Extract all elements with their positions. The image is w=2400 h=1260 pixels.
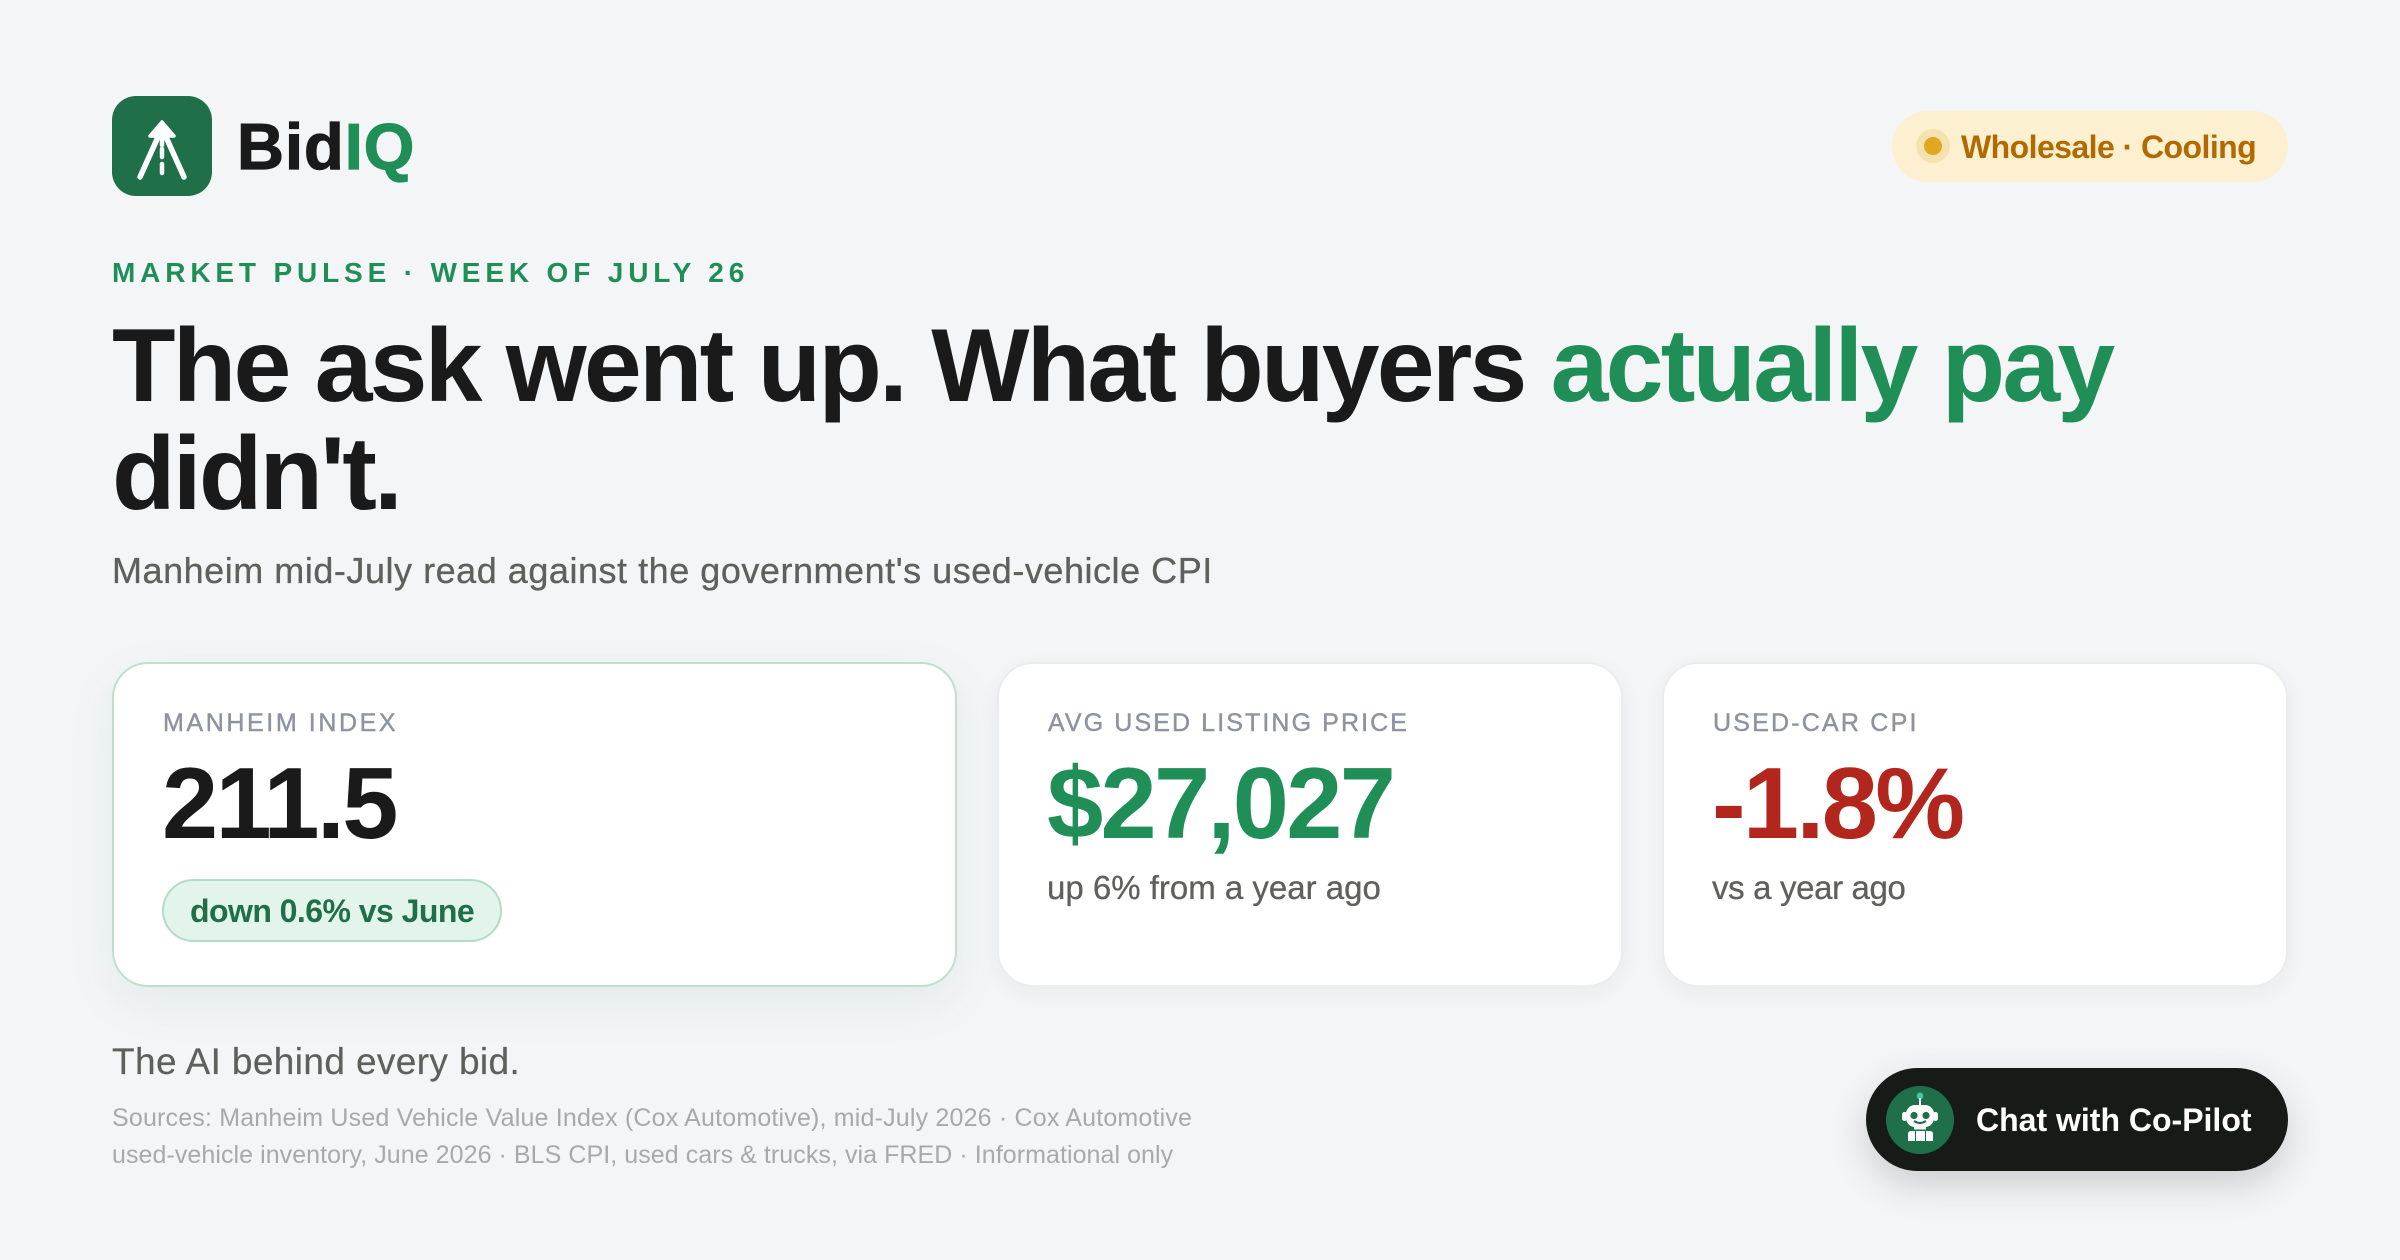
card: used-car CPI bbox=[1662, 662, 2288, 987]
sources: Sources: Manheim Used Vehicle Value Index (Cox Automotive), mid-July 2026 · Cox Automotive bbox=[112, 1104, 1192, 1132]
label: AVG USED LISTING PRICE bbox=[1048, 709, 1409, 737]
title: didn't. bbox=[112, 416, 400, 532]
wordmark: BidIQ bbox=[237, 110, 415, 183]
status dot bbox=[1916, 129, 1950, 163]
note: vs a year ago bbox=[1712, 869, 1906, 906]
title: The ask went up. What buyers actually pay bbox=[112, 308, 2112, 424]
value: 211.5 bbox=[162, 748, 396, 860]
logo mark bbox=[112, 96, 212, 196]
status pill bbox=[1892, 111, 2288, 182]
icon: robot avatar bbox=[1886, 1086, 1954, 1154]
change badge: down 0.6% vs June bbox=[190, 893, 474, 929]
eyebrow: MARKET PULSE · WEEK OF JULY 26 bbox=[112, 257, 749, 288]
label: MANHEIM INDEX bbox=[163, 709, 398, 737]
note: up 6% from a year ago bbox=[1047, 869, 1381, 906]
change badge bbox=[162, 879, 502, 942]
sources: used-vehicle inventory, June 2026 · BLS CPI, used cars & trucks, via FRED · Informational only bbox=[112, 1141, 1173, 1169]
chat button bbox=[1866, 1068, 2288, 1171]
card: Manheim index bbox=[112, 662, 957, 987]
subtitle: Manheim mid-July read against the government's used-vehicle CPI bbox=[112, 550, 1213, 591]
tagline: The AI behind every bid. bbox=[112, 1041, 520, 1082]
sources bbox=[112, 1104, 1192, 1169]
title bbox=[112, 308, 2115, 532]
label: USED-CAR CPI bbox=[1713, 709, 1919, 737]
value: -1.8% bbox=[1712, 748, 1962, 860]
card: average listing price bbox=[997, 662, 1623, 987]
value: $27,027 bbox=[1047, 748, 1393, 860]
button label: Chat with Co-Pilot bbox=[1976, 1102, 2252, 1138]
status text: Wholesale · Cooling bbox=[1961, 129, 2256, 165]
